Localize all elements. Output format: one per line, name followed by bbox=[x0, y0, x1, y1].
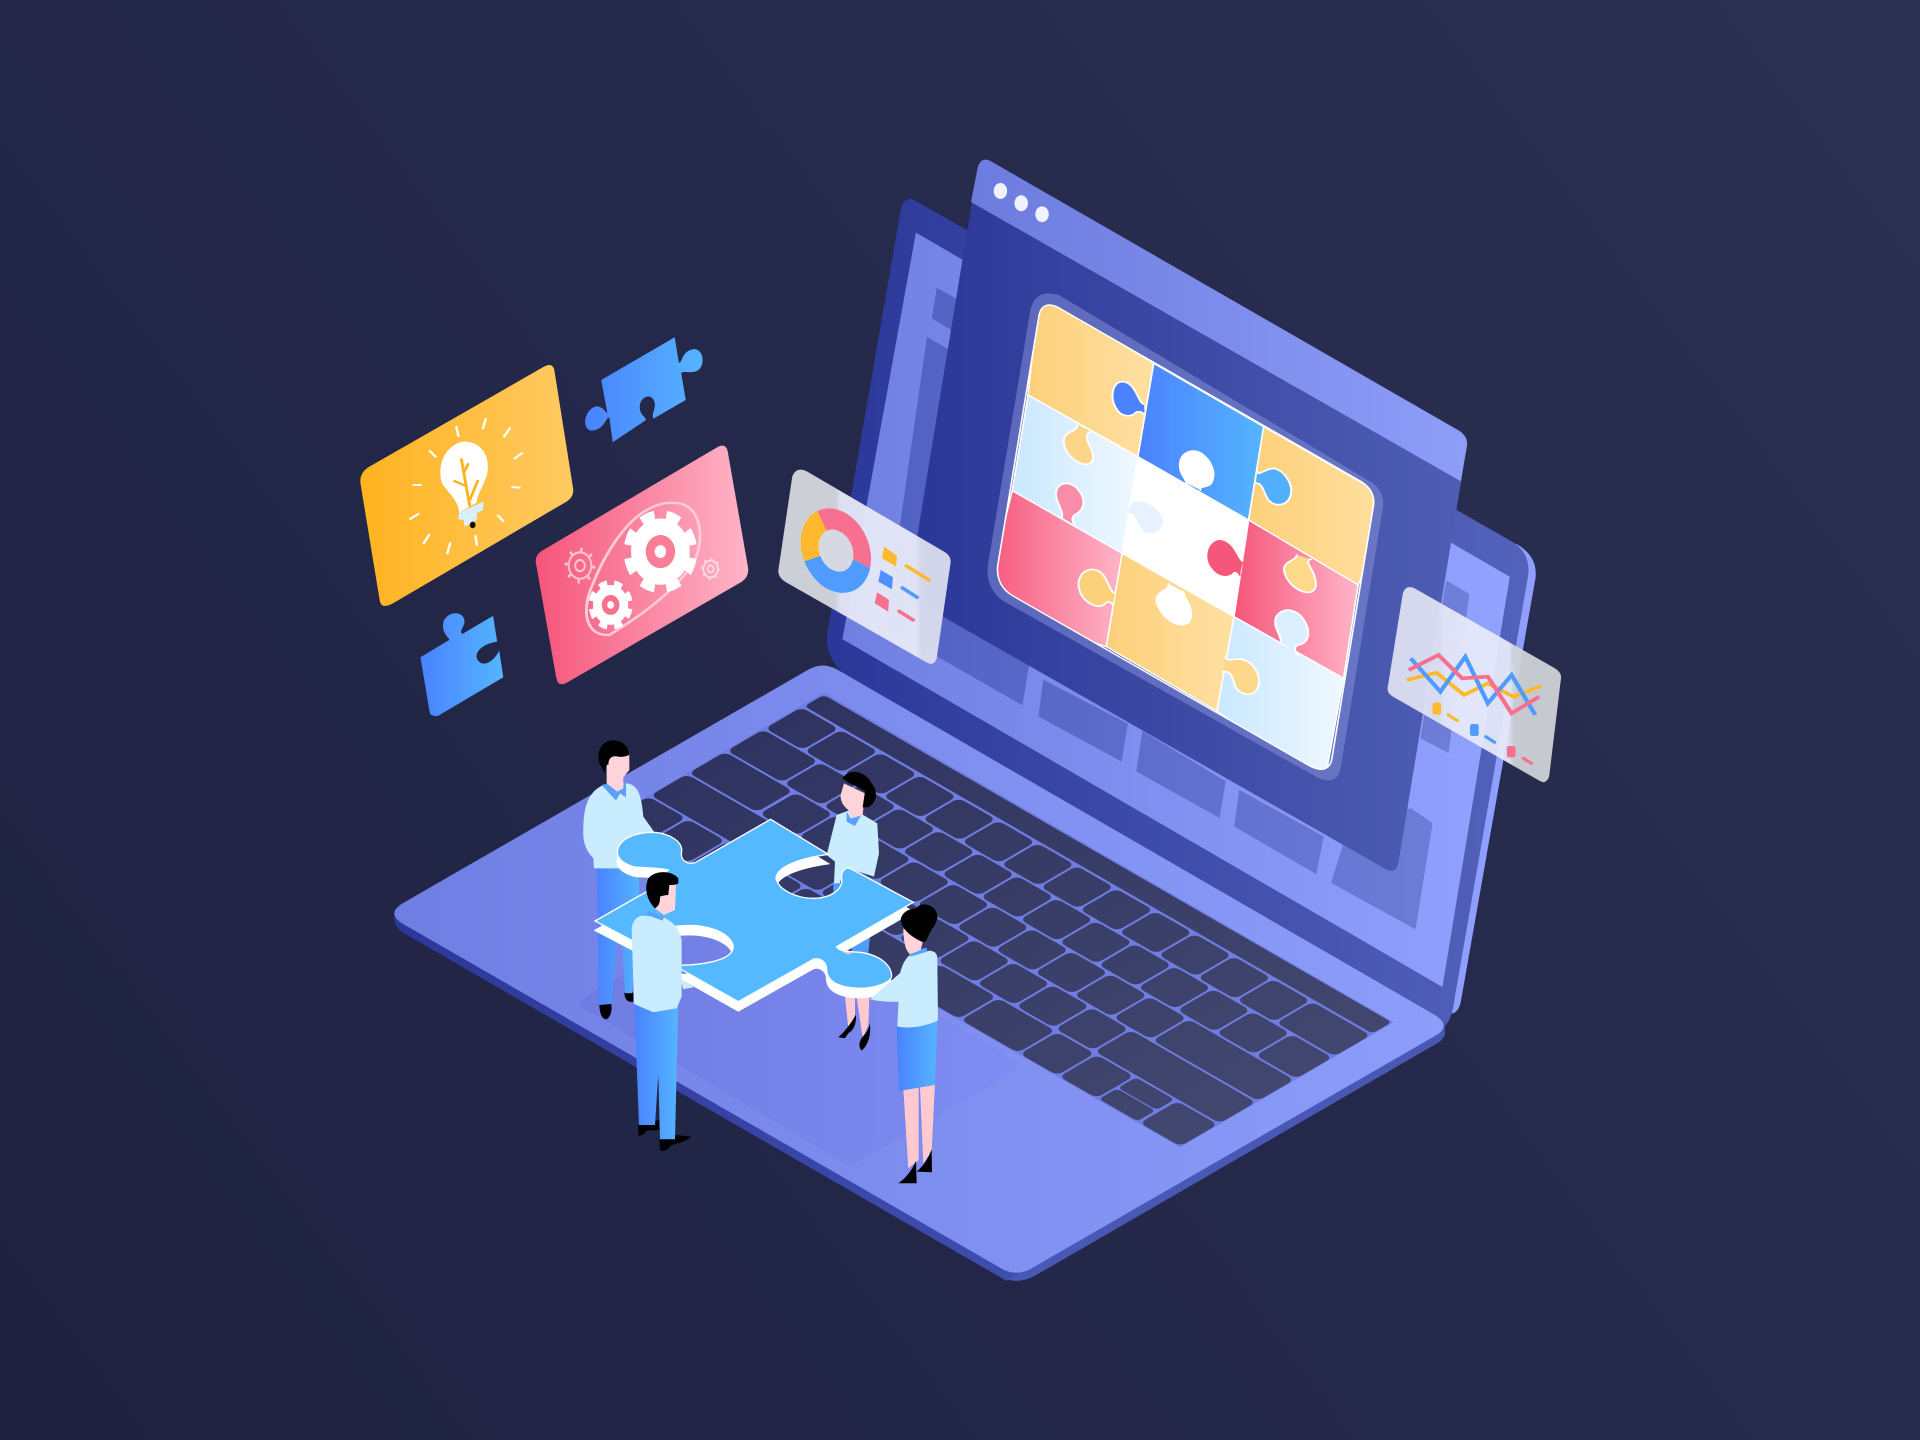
light bulb bbox=[440, 442, 488, 513]
face bbox=[841, 783, 865, 818]
puzzle cells bbox=[998, 306, 1373, 769]
bulb tip bbox=[470, 522, 476, 528]
heels bbox=[838, 1015, 870, 1051]
puzzle piece: lower floating bbox=[420, 613, 503, 716]
collar bbox=[647, 911, 664, 921]
yellow card bbox=[360, 365, 573, 606]
skirt bbox=[833, 883, 870, 953]
hand on puzzle bbox=[842, 952, 853, 954]
small gear bbox=[588, 579, 633, 631]
trackpad bbox=[579, 905, 1019, 1164]
keyboard top bar bbox=[804, 695, 1392, 1034]
window dots bbox=[994, 183, 1049, 222]
glass panel bbox=[1388, 587, 1561, 782]
lid body bbox=[827, 199, 1528, 1026]
bulb base bbox=[458, 502, 484, 527]
puzzle piece: upper floating bbox=[585, 337, 703, 442]
shirt bbox=[897, 951, 938, 1028]
skirt bbox=[897, 1019, 937, 1091]
collar bbox=[847, 812, 862, 826]
shoes bbox=[638, 1120, 692, 1151]
face bbox=[607, 753, 629, 792]
laptop base bbox=[394, 666, 1445, 1281]
shirt bbox=[632, 916, 682, 1012]
gears card bbox=[536, 446, 748, 684]
trousers bbox=[597, 867, 640, 1004]
face bbox=[903, 928, 923, 954]
puzzle tabs bbox=[1056, 382, 1316, 694]
person: man front left bbox=[632, 872, 694, 1151]
trousers bbox=[634, 1003, 678, 1139]
gear belt bbox=[586, 503, 700, 635]
idea card bbox=[360, 365, 573, 606]
puzzle outline bbox=[997, 305, 1374, 769]
legs bbox=[845, 997, 869, 1038]
legs bbox=[903, 1083, 935, 1168]
donut chart bbox=[801, 501, 871, 600]
shirt bbox=[583, 783, 654, 868]
collar bbox=[602, 782, 626, 801]
glass panel bbox=[778, 470, 951, 664]
pink card bbox=[536, 446, 748, 684]
keyboard rows bbox=[612, 708, 1369, 1146]
faint gear left bbox=[567, 550, 593, 581]
puzzle piece: top surface bbox=[595, 819, 913, 1002]
keyboard well bbox=[610, 692, 1393, 1147]
shoes bbox=[599, 993, 633, 1019]
laptop lid bbox=[827, 199, 1536, 1026]
collar bbox=[910, 948, 927, 957]
hair bbox=[646, 872, 678, 908]
screen tiles bbox=[885, 288, 1469, 929]
floating glass card: line chart bbox=[1388, 587, 1561, 782]
app window bbox=[907, 160, 1467, 871]
puzzle frame bbox=[987, 293, 1383, 780]
team and big puzzle piece bbox=[583, 740, 938, 1183]
hair bbox=[843, 772, 876, 807]
person: woman back right bbox=[827, 772, 879, 1051]
arm bbox=[680, 978, 694, 989]
puzzle piece: thickness bbox=[595, 829, 913, 1011]
line series bbox=[1407, 655, 1541, 715]
floating glass card: donut chart bbox=[778, 470, 951, 664]
donut red bbox=[817, 505, 871, 568]
person: man back left bbox=[583, 740, 654, 1019]
donut blue bbox=[804, 543, 870, 600]
faint gear right bbox=[702, 559, 719, 579]
floating cards bbox=[360, 337, 748, 716]
screen puzzle bbox=[984, 293, 1561, 787]
hair bbox=[901, 904, 937, 942]
lid rim highlight bbox=[1442, 544, 1536, 1014]
lid screen bbox=[842, 233, 1510, 987]
base right edge bbox=[998, 1024, 1445, 1281]
shirt bbox=[827, 811, 879, 883]
donut hole bbox=[818, 526, 853, 575]
window body bbox=[907, 160, 1467, 871]
base left edge bbox=[394, 912, 1016, 1281]
base top surface bbox=[394, 666, 1444, 1273]
person: woman front right bbox=[870, 904, 938, 1183]
window header bbox=[971, 160, 1467, 481]
heels bbox=[898, 1149, 932, 1183]
donut yellow bbox=[801, 507, 836, 569]
large gear bbox=[623, 509, 698, 594]
keyboard keys bbox=[612, 695, 1392, 1146]
hair bbox=[598, 740, 629, 773]
arm bbox=[870, 972, 902, 1002]
bulb filament bbox=[453, 458, 478, 507]
face bbox=[655, 885, 676, 915]
bulb rays bbox=[410, 419, 522, 553]
chart legend bbox=[1432, 703, 1531, 763]
donut legend bbox=[875, 547, 929, 620]
